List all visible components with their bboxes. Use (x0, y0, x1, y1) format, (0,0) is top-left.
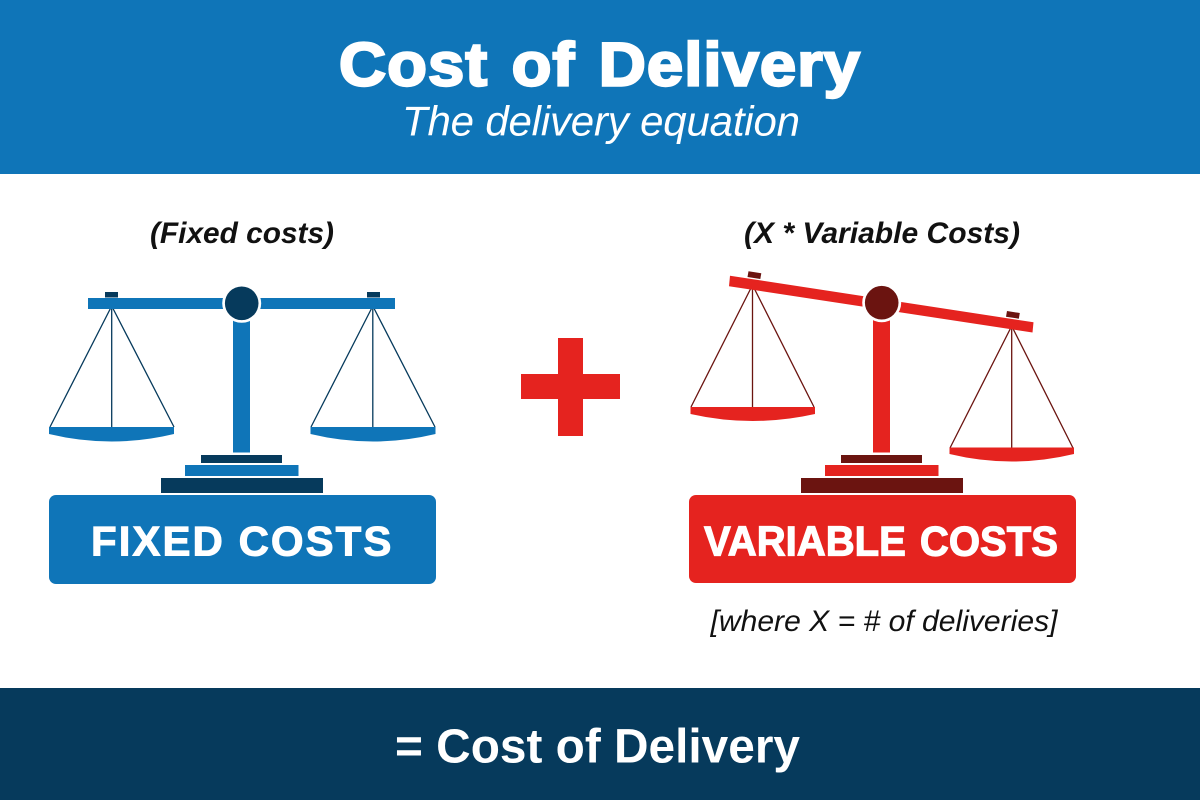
header band (0, 0, 1200, 174)
footer band (0, 688, 1200, 800)
fixed costs label box: FIXED COSTS (91, 518, 393, 564)
tilted scale: variable costs (690, 271, 1074, 493)
footnote: [where X = # of deliveries] (709, 605, 1058, 638)
fixed costs label box (49, 495, 436, 584)
subtitle: The delivery equation (402, 98, 800, 144)
variable costs label box (689, 495, 1076, 583)
balanced scale: fixed costs (49, 284, 436, 493)
right caption: (X * Variable Costs) (744, 217, 1020, 250)
footer band: = Cost of Delivery (395, 720, 800, 774)
left caption: (Fixed costs) (150, 217, 334, 250)
icon: plus sign (521, 338, 620, 436)
title: Cost of Delivery (339, 30, 861, 98)
variable costs label box: VARIABLE COSTS (704, 518, 1058, 564)
